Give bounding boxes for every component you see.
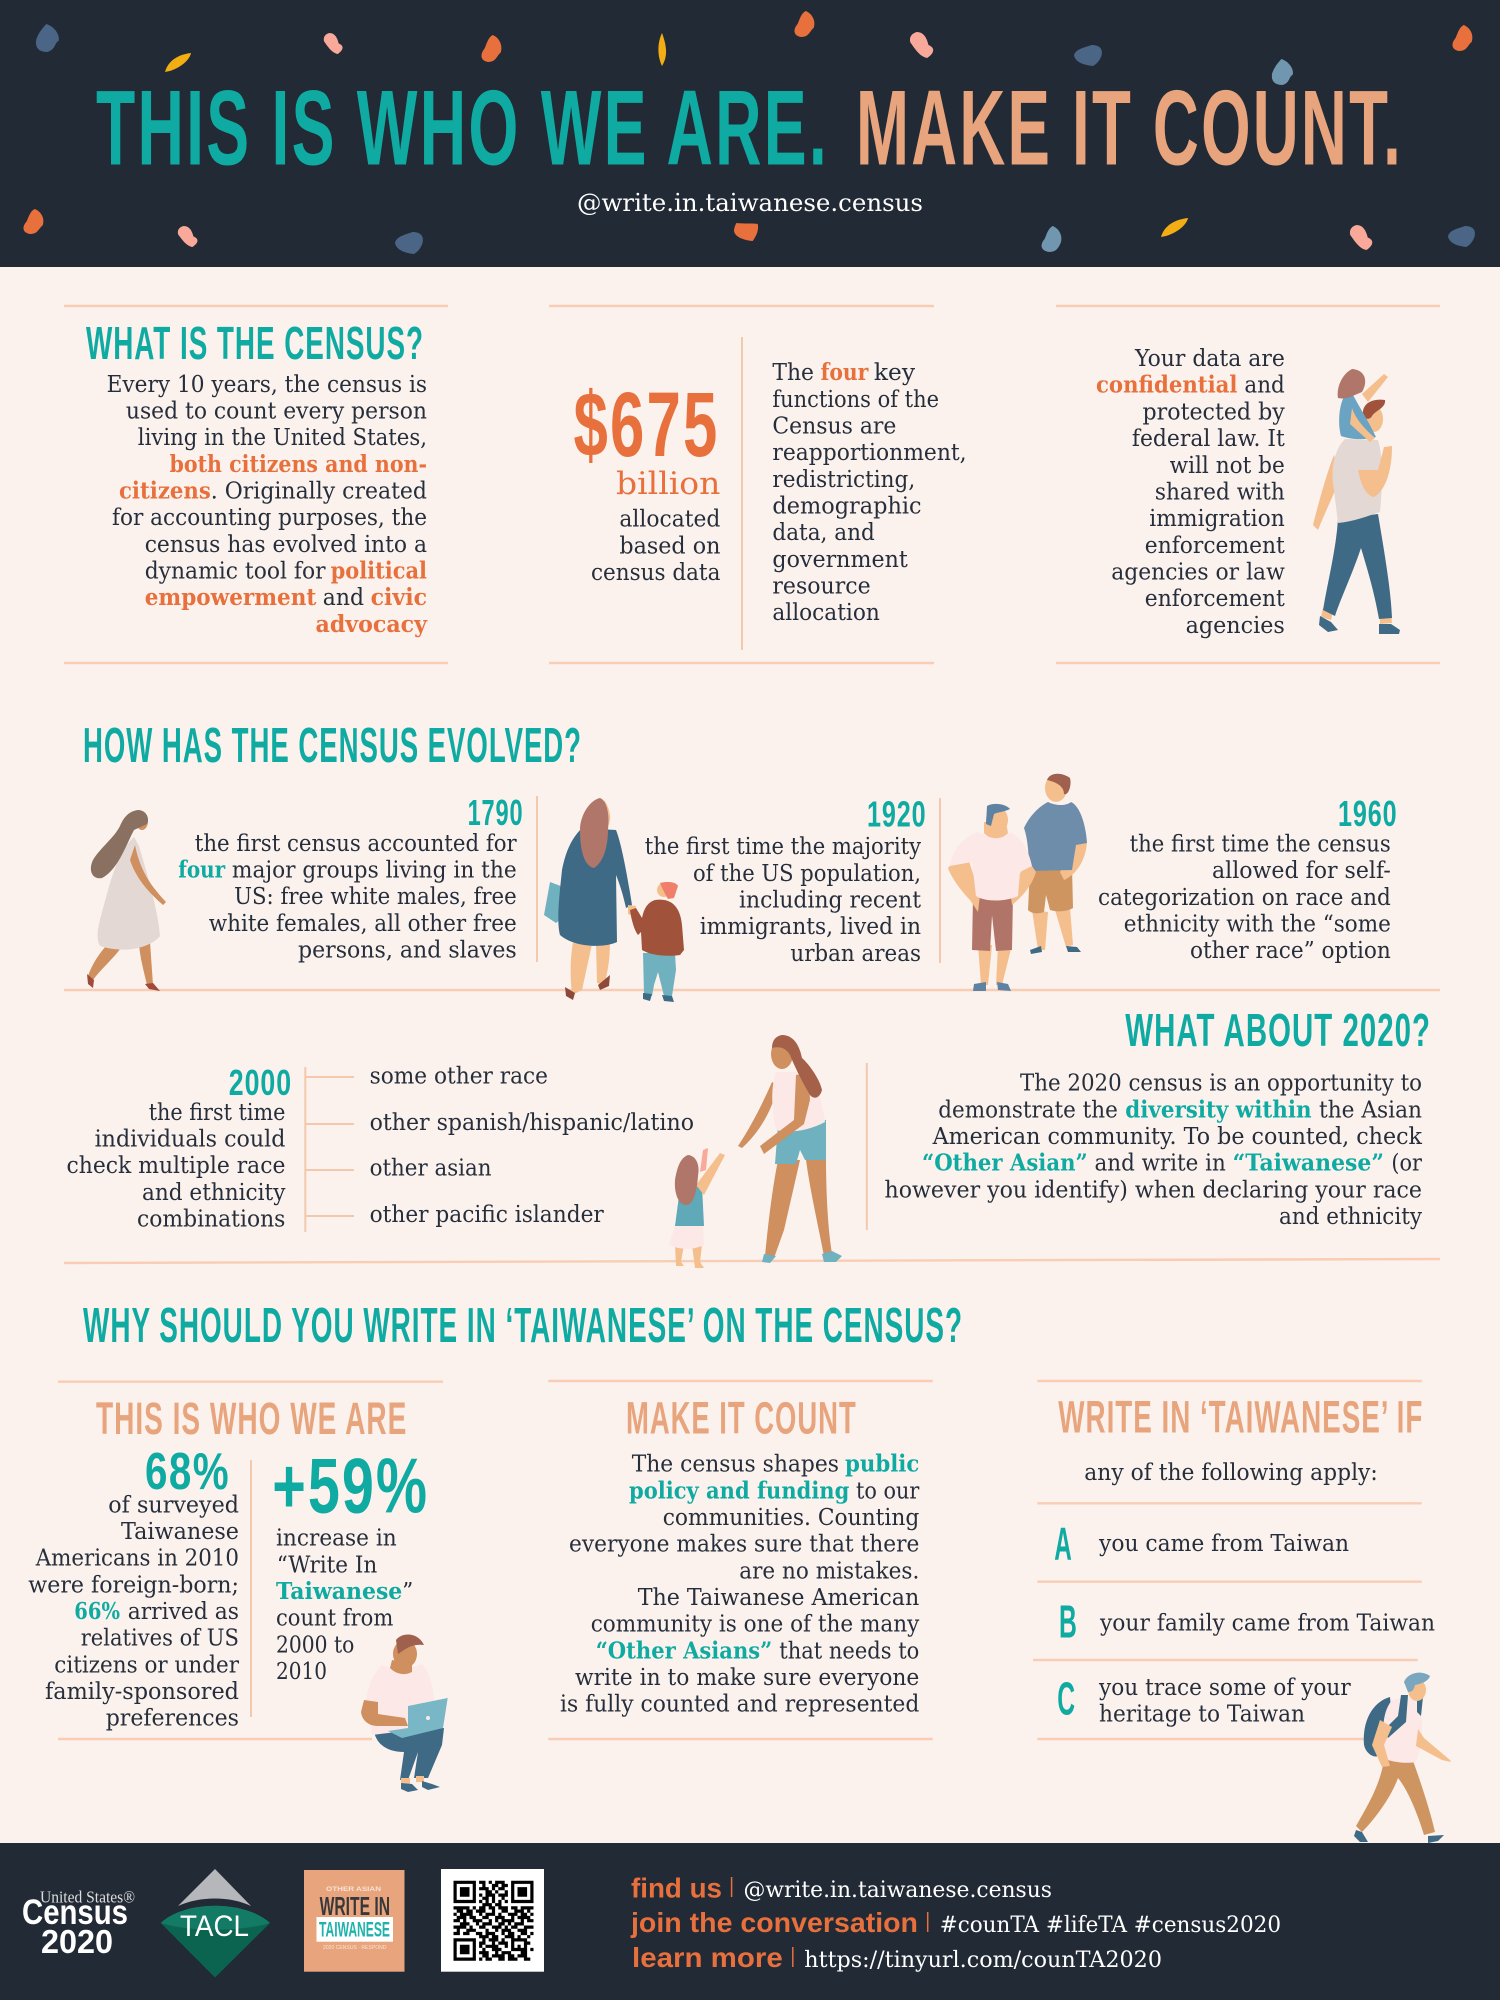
logo: census 2020: Census bbox=[22, 1893, 128, 1932]
icon: mother and child bbox=[544, 798, 684, 1002]
stat: 675 billion: $675 bbox=[574, 374, 720, 476]
text block: 1790: the first census accounted for bbox=[195, 831, 517, 857]
option B: your family came from Taiwan bbox=[1099, 1611, 1435, 1637]
section: 2000 and 2020 bbox=[64, 1004, 1440, 1268]
text block: four key functions: reapportionment, bbox=[772, 440, 967, 466]
text block: confidential: agencies or law bbox=[1111, 560, 1285, 586]
icon: two men standing bbox=[948, 774, 1087, 991]
text block: census definition: dynamic tool for bbox=[145, 558, 326, 584]
diagram: race options: other asian bbox=[370, 1156, 492, 1182]
heading: make it count: MAKE IT COUNT bbox=[626, 1392, 857, 1443]
confetti decoration bbox=[23, 11, 1475, 254]
stat: 68 percent: citizens or under bbox=[54, 1652, 239, 1678]
stat: plus 59 percent: Taiwanese bbox=[276, 1578, 402, 1605]
text block: 2020 census: American community. To be counted, check bbox=[932, 1124, 1423, 1150]
logo: write in taiwanese: 2020 CENSUS · RESPOND bbox=[323, 1945, 387, 1951]
option B: B bbox=[1059, 1596, 1078, 1648]
text block: confidential bbox=[1096, 346, 1286, 639]
text block: four key functions: Census are bbox=[772, 414, 896, 440]
QR code bbox=[441, 1869, 544, 1972]
contact line: learn more: learn more bbox=[632, 1942, 783, 1973]
text block: 2020 census: “Taiwanese” bbox=[1233, 1150, 1384, 1177]
panel: 675 billion and four functions bbox=[549, 306, 967, 663]
icon: mother and daughter reaching bbox=[669, 1035, 842, 1268]
text block: confidential: will not be bbox=[1170, 453, 1285, 479]
text block: 1790: persons, and slaves bbox=[298, 938, 517, 964]
text block: four key functions: government bbox=[772, 547, 909, 573]
text block: make it count: community is one of the many bbox=[591, 1612, 919, 1638]
logo: write in taiwanese: TAIWANESE bbox=[319, 1919, 390, 1942]
logo: write in taiwanese bbox=[304, 1870, 404, 1972]
text block: 1960: allowed for self- bbox=[1212, 858, 1391, 884]
diagram: race options: other pacific islander bbox=[370, 1202, 604, 1228]
contact line: find us: find us bbox=[631, 1872, 722, 1903]
text block: confidential: protected by bbox=[1142, 400, 1285, 426]
stat: 68 percent: Americans in 2010 bbox=[35, 1546, 239, 1572]
text block: 2000: combinations bbox=[137, 1207, 285, 1233]
stat: 68 percent: relatives of US bbox=[81, 1626, 239, 1652]
text block: four key functions: demographic bbox=[772, 494, 922, 520]
text block: confidential: enforcement bbox=[1145, 586, 1286, 612]
contact line: join the conversation: #counTA #lifeTA #census2020 bbox=[940, 1913, 1281, 1938]
contact line: join the conversation: join the conversation bbox=[630, 1907, 918, 1938]
stat: 68 percent: family-sponsored bbox=[45, 1679, 239, 1705]
footer bbox=[0, 1843, 1500, 2000]
text block: 2020 census: (or bbox=[1391, 1151, 1422, 1177]
diagram: race options: other spanish/hispanic/latino bbox=[370, 1110, 694, 1136]
text block: census definition: empowerment bbox=[145, 584, 317, 611]
text block: 1790: US: free white males, free bbox=[234, 884, 517, 910]
text block: make it count: public bbox=[845, 1451, 919, 1478]
text block: 1790: 1790 bbox=[468, 792, 523, 833]
text block: make it count: “Other Asians” bbox=[596, 1637, 772, 1664]
text block: confidential: shared with bbox=[1155, 480, 1285, 506]
text block: 2020 census: demonstrate the bbox=[938, 1097, 1118, 1123]
stat: plus 59 percent: 2000 to bbox=[276, 1632, 354, 1658]
text block: census definition: used to count every person bbox=[126, 399, 427, 425]
text block: 2000: the first time bbox=[149, 1100, 285, 1126]
panel: what is the census bbox=[64, 306, 448, 663]
panel: this is who we are bbox=[28, 1382, 448, 1792]
stat: 675 billion: based on bbox=[619, 533, 721, 559]
icon: woman in dress bbox=[87, 810, 166, 991]
logo: census 2020: 2020 bbox=[41, 1923, 113, 1960]
text block: 1960 bbox=[1098, 793, 1398, 964]
text block: census definition: and bbox=[323, 585, 364, 611]
panel: make it count bbox=[548, 1381, 933, 1739]
text block: 1920 bbox=[645, 794, 926, 967]
heading: this is who we are: THIS IS WHO WE ARE bbox=[96, 1393, 407, 1444]
text block: census definition: advocacy bbox=[316, 611, 428, 638]
stat: 68 percent: preferences bbox=[106, 1706, 239, 1732]
stat: 68 percent: Taiwanese bbox=[121, 1519, 239, 1545]
text block: make it count: that needs to bbox=[779, 1638, 919, 1664]
title: THIS IS WHO WE ARE. bbox=[96, 68, 829, 188]
text block: make it count bbox=[560, 1451, 920, 1718]
text block: census definition: . Originally created bbox=[211, 478, 427, 504]
logo: write in taiwanese: OTHER ASIAN bbox=[326, 1886, 381, 1893]
text block: 2000: individuals could bbox=[95, 1127, 286, 1153]
text block: make it count: to our bbox=[856, 1478, 919, 1504]
text block: confidential: federal law. It bbox=[1132, 426, 1286, 452]
text block: four key functions: data, and bbox=[772, 520, 875, 546]
text block: 1790: major groups living in the bbox=[232, 858, 517, 884]
stat: 68 percent: of surveyed bbox=[108, 1492, 239, 1518]
text block: confidential: and bbox=[1244, 373, 1285, 399]
text block: 1960: the first time the census bbox=[1130, 832, 1391, 858]
icon: man with laptop bbox=[361, 1635, 448, 1792]
logo: TACL: TACL bbox=[180, 1910, 249, 1943]
text block: confidential: Your data are bbox=[1134, 346, 1285, 372]
text block: 1960: other race” option bbox=[1190, 938, 1391, 964]
text block: make it count: everyone makes sure that there bbox=[569, 1532, 919, 1558]
text block: census definition: Every 10 years, the census is bbox=[107, 372, 427, 398]
text block: make it count: communities. Counting bbox=[663, 1505, 920, 1531]
option C: C bbox=[1057, 1672, 1076, 1724]
text block: 1920: the first time the majority bbox=[645, 834, 921, 860]
text block: 1960: 1960 bbox=[1338, 793, 1398, 834]
stat: plus 59 percent: “Write In bbox=[277, 1552, 377, 1578]
text block: make it count: write in to make sure everyone bbox=[575, 1665, 919, 1691]
logo: write in taiwanese: WRITE IN bbox=[320, 1891, 390, 1921]
timeline section 1790 to 1960 bbox=[64, 774, 1440, 1002]
text block: make it count: are no mistakes. bbox=[739, 1558, 919, 1584]
diagram: race options: some other race bbox=[370, 1063, 548, 1089]
stat: 675 billion: census data bbox=[591, 560, 721, 586]
text block: confidential: enforcement bbox=[1145, 533, 1286, 559]
stat: 68 percent: 66% bbox=[74, 1598, 120, 1625]
option C: you trace some of your bbox=[1098, 1675, 1351, 1701]
text block: census definition: census has evolved into a bbox=[145, 532, 427, 558]
panel: data confidentiality bbox=[1056, 306, 1440, 663]
text block: 1960: ethnicity with the “some bbox=[1124, 912, 1391, 938]
stat: 68 percent: were foreign-born; bbox=[28, 1572, 239, 1598]
text block: four key functions: redistricting, bbox=[772, 467, 915, 493]
text block: 2020 census: and ethnicity bbox=[1279, 1204, 1422, 1230]
text block: 2020 census: the Asian bbox=[1319, 1097, 1422, 1123]
text block: 1920: urban areas bbox=[790, 941, 921, 967]
text block: 2000 bbox=[66, 1062, 292, 1233]
contact line: learn more: https://tinyurl.com/counTA2020 bbox=[804, 1948, 1162, 1973]
text block: four key functions: allocation bbox=[772, 600, 880, 626]
text block: 1790 bbox=[178, 792, 523, 964]
intro line: any of the following apply: bbox=[1084, 1460, 1378, 1486]
option A: A bbox=[1054, 1517, 1073, 1569]
text block: 2020 census: and write in bbox=[1094, 1151, 1226, 1177]
text block: 2000: and ethnicity bbox=[142, 1180, 285, 1206]
text block: make it count: The Taiwanese American bbox=[638, 1585, 919, 1611]
stat: plus 59 percent: 2010 bbox=[276, 1659, 327, 1685]
logo: census 2020: United States® bbox=[40, 1888, 135, 1907]
contact line: find us bbox=[631, 1872, 1052, 1903]
header banner bbox=[0, 0, 1500, 267]
stat: 68 percent bbox=[28, 1443, 239, 1732]
text block: four key functions: functions of the bbox=[772, 387, 939, 413]
stat: 68 percent: arrived as bbox=[128, 1599, 239, 1625]
text block: 1920: 1920 bbox=[867, 794, 926, 835]
contact line: learn more bbox=[632, 1942, 1162, 1973]
heading: what is the census: WHAT IS THE CENSUS? bbox=[86, 317, 424, 369]
text block: 2020 census: diversity within bbox=[1125, 1096, 1312, 1123]
panel: write in taiwanese if bbox=[1033, 1381, 1451, 1843]
stat: 675 billion: billion bbox=[616, 466, 720, 502]
logo: census 2020 bbox=[22, 1888, 135, 1960]
text block: 1960: categorization on race and bbox=[1098, 885, 1391, 911]
icon: walking man with backpack bbox=[1354, 1673, 1451, 1843]
contact line: find us: @write.in.taiwanese.census bbox=[744, 1878, 1052, 1903]
text block: confidential: immigration bbox=[1149, 506, 1285, 532]
option A: you came from Taiwan bbox=[1098, 1531, 1349, 1557]
text block: 1790: white females, all other free bbox=[209, 911, 517, 937]
text block: four key functions bbox=[772, 359, 967, 626]
text block: make it count: policy and funding bbox=[629, 1477, 849, 1504]
text block: census definition: for accounting purposes, the bbox=[112, 505, 427, 531]
text block: four key functions: four bbox=[821, 359, 869, 386]
option B bbox=[1059, 1596, 1435, 1648]
text block: census definition: citizens bbox=[119, 478, 211, 504]
instagram handle: @write.in.taiwanese.census bbox=[577, 189, 923, 217]
stat: plus 59 percent: +59% bbox=[272, 1442, 429, 1530]
stat: 675 billion bbox=[574, 374, 721, 586]
text block: 2020 census: “Other Asian” bbox=[922, 1150, 1088, 1177]
text block: census definition: political bbox=[331, 558, 427, 584]
contact line: join the conversation bbox=[630, 1907, 1281, 1938]
stat: plus 59 percent: increase in bbox=[276, 1526, 397, 1552]
heading: how has the census evolved: HOW HAS THE CENSUS EVOLVED? bbox=[83, 719, 582, 773]
text block: four key functions: resource bbox=[772, 574, 871, 600]
text block: 1920: including recent bbox=[739, 888, 922, 914]
text block: 2000: 2000 bbox=[229, 1062, 292, 1103]
text block: census definition bbox=[107, 372, 428, 638]
text block: census definition: living in the United States, bbox=[138, 425, 427, 451]
text block: make it count: is fully counted and represented bbox=[560, 1692, 920, 1718]
text block: four key functions: key bbox=[874, 360, 915, 386]
stat: plus 59 percent: ” bbox=[402, 1579, 413, 1605]
text block: 2020 census bbox=[884, 1071, 1423, 1230]
text block: 1920: of the US population, bbox=[693, 861, 921, 887]
icon: father carrying child bbox=[1313, 369, 1400, 634]
text block: confidential: agencies bbox=[1186, 613, 1285, 639]
text block: make it count: The census shapes bbox=[632, 1452, 839, 1478]
text block: 1790: four bbox=[178, 857, 226, 884]
stat: 68 percent: 68% bbox=[145, 1443, 230, 1501]
text block: census definition: civic bbox=[371, 584, 427, 611]
option A bbox=[1054, 1517, 1349, 1569]
stat: plus 59 percent bbox=[272, 1442, 429, 1685]
text block: 2020 census: The 2020 census is an opportunity to bbox=[1020, 1071, 1422, 1097]
text block: four key functions: The bbox=[772, 360, 814, 386]
logo: TACL bbox=[161, 1869, 270, 1978]
text block: 1920: immigrants, lived in bbox=[700, 914, 921, 940]
text block: census definition: both citizens and non- bbox=[170, 451, 427, 478]
text block: 2020 census: however you identify) when declaring your race bbox=[884, 1177, 1422, 1203]
option C bbox=[1057, 1672, 1351, 1728]
stat: 675 billion: allocated bbox=[619, 507, 721, 533]
text block: confidential: confidential bbox=[1096, 372, 1238, 399]
option C: heritage to Taiwan bbox=[1099, 1702, 1305, 1728]
text block: 2000: check multiple race bbox=[66, 1153, 285, 1179]
stat: plus 59 percent: count from bbox=[276, 1606, 393, 1632]
diagram: race options bbox=[305, 1063, 694, 1232]
